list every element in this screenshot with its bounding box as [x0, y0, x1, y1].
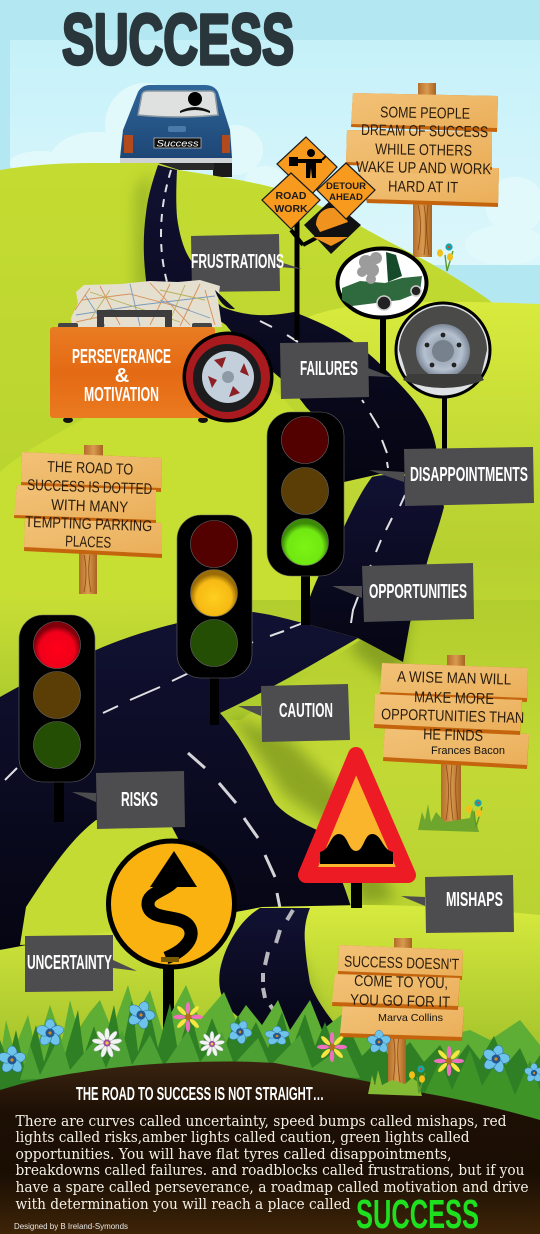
sign: detour ahead: DETOUR [326, 181, 366, 192]
sign text: YOU GO FOR IT [350, 992, 451, 1011]
suitcase text [72, 346, 171, 406]
sign text [344, 954, 460, 1024]
hill: bottom foreground [0, 905, 540, 1130]
road: big lower sweep [0, 612, 395, 950]
sign text: MAKE MORE [414, 689, 494, 708]
credit: Designed by B Ireland-Symonds [14, 1221, 128, 1231]
post: curve sign [163, 960, 174, 1073]
icon: flat tyre [396, 303, 490, 397]
body paragraph [16, 1114, 528, 1213]
sign text [356, 104, 492, 197]
road: bottom section [219, 908, 340, 1050]
sign text: WITH MANY [51, 497, 128, 516]
sign: detour ahead: AHEAD [329, 192, 363, 203]
label: caution: CAUTION [279, 700, 333, 722]
label: failures [280, 342, 391, 399]
icon: flowers by first sign [437, 243, 453, 271]
label: caution [238, 684, 350, 742]
label: opportunities [332, 563, 474, 622]
icon: flowers by wise man sign [466, 799, 482, 827]
title: SUCCESS [62, 1, 294, 80]
post: speed bump sign [351, 880, 362, 908]
road work signs [262, 137, 375, 340]
label: mishaps [401, 875, 514, 933]
sign text: SOME PEOPLE [380, 104, 470, 123]
grass tuft by wise man sign [418, 804, 479, 832]
wooden sign: some people dream of success [346, 83, 499, 257]
sign text: Frances Bacon [431, 745, 505, 757]
label: failures: FAILURES [300, 358, 358, 380]
label: mishaps: MISHAPS [446, 889, 503, 911]
wooden sign: wise man [374, 655, 529, 822]
traffic light: red [19, 615, 95, 822]
icon: spare tyre [182, 332, 274, 422]
sign text: A WISE MAN WILL [397, 669, 512, 689]
hill: back [0, 163, 540, 700]
sign text: SUCCESS IS DOTTED [27, 477, 152, 498]
hill: lower left [0, 591, 360, 740]
label: risks [72, 771, 185, 829]
sign: detour ahead [317, 163, 375, 219]
sign text [25, 459, 152, 552]
hill: base behind lower roads [0, 600, 540, 930]
traffic light: amber [177, 515, 252, 725]
sign text: THE ROAD TO [47, 459, 133, 479]
wooden sign: marva collins [332, 938, 464, 1085]
label: disappointments [369, 447, 534, 506]
road: upper winding section [135, 165, 440, 482]
sign text: TEMPTING PARKING [25, 514, 152, 535]
label: uncertainty [25, 935, 137, 992]
post: breakdown [380, 315, 386, 375]
suitcase text: MOTIVATION [84, 384, 159, 406]
grass [0, 985, 540, 1125]
body paragraph: opportunities. You will have flat tyres called disappointments, [16, 1147, 452, 1163]
soil [0, 1062, 540, 1234]
sign text: HARD AT IT [388, 178, 459, 197]
body paragraph: with determination you will reach a place called [16, 1197, 350, 1213]
suitcase: perseverance and motivation [50, 310, 215, 423]
sign text: DREAM OF SUCCESS [361, 122, 488, 141]
sign text: WAKE UP AND WORK [356, 159, 492, 178]
post: flat tyre [442, 395, 447, 451]
speed bump warning sign [306, 755, 408, 875]
suitcase text: & [115, 365, 129, 387]
sign text [381, 669, 524, 757]
label: uncertainty: UNCERTAINTY [27, 952, 112, 974]
sign: flagman [277, 137, 337, 196]
sign: road work: ROAD [276, 190, 307, 202]
body paragraph: There are curves called uncertainty, speed bumps called mishaps, red [16, 1114, 506, 1130]
hill: right middle [300, 302, 540, 720]
flowers [0, 997, 540, 1083]
hill: left middle [0, 372, 340, 650]
clouds [10, 83, 540, 265]
traffic light: green [267, 412, 344, 625]
hill: sign mound [20, 820, 205, 945]
icon: flowers by marva collins sign [409, 1065, 425, 1093]
sign: road work [262, 173, 320, 229]
sign text: PLACES [65, 533, 111, 552]
suitcase text: PERSEVERANCE [72, 346, 171, 368]
body paragraph: lights called risks,amber lights called caution, green lights called [16, 1130, 470, 1146]
sign text: COME TO YOU, [354, 973, 448, 992]
wooden sign: parking places [14, 445, 162, 594]
label: opportunities: OPPORTUNITIES [369, 581, 467, 603]
grass tuft by marva collins sign [368, 1070, 422, 1096]
car [120, 85, 232, 177]
sign text: Marva Collins [378, 1012, 443, 1024]
map [71, 280, 235, 327]
sign text: HE FINDS [423, 726, 483, 745]
sign text: SUCCESS DOESN'T [344, 954, 460, 974]
sign: road work: WORK [274, 203, 308, 215]
number plate: Success [156, 139, 199, 150]
road: middle section [303, 475, 444, 690]
label: risks: RISKS [121, 789, 158, 811]
label: frustrations: FRUSTRATIONS [191, 251, 284, 273]
body paragraph: have a spare called perseverance, a roadmap called motivation and drive [16, 1180, 528, 1196]
body paragraph: breakdowns called failures. and roadblocks called frustrations, but if you [16, 1163, 524, 1179]
icon: broken down car [338, 248, 426, 318]
label: frustrations [191, 234, 302, 292]
curve warning sign [108, 841, 234, 967]
sign text: WHILE OTHERS [375, 141, 472, 160]
heading: road to success: THE ROAD TO SUCCESS IS NOT STRAIGHT… [76, 1084, 324, 1104]
